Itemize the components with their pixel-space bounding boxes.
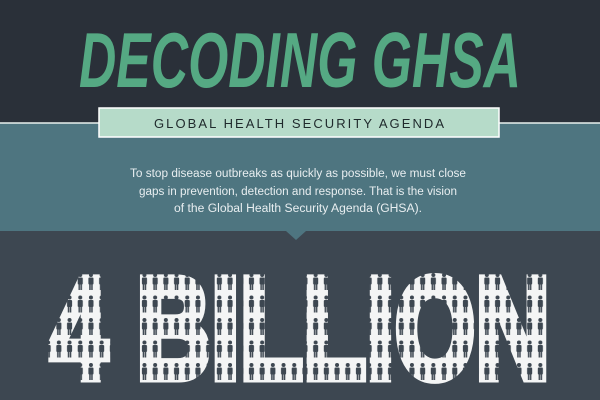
top dark band [0,0,600,123]
arrow [286,231,306,240]
intro paragraph: of the Global Health Security Agenda (GHSA). [174,203,422,215]
teal band [0,123,600,231]
subtitle box: GLOBAL HEALTH SECURITY AGENDA [154,116,444,131]
intro paragraph: To stop disease outbreaks as quickly as possible, we must close [130,168,466,180]
bottom section [0,231,600,400]
subtitle box [99,108,499,137]
intro paragraph [130,168,466,215]
intro paragraph: gaps in prevention, detection and response. That is the vision [139,186,457,198]
